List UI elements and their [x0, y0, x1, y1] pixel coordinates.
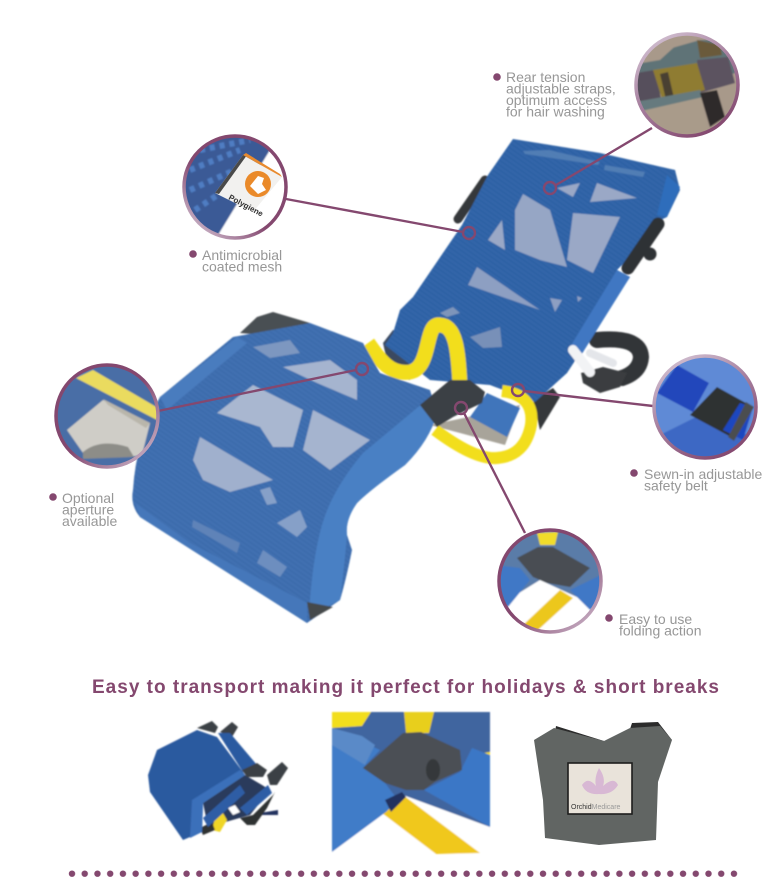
headrest side frame with knob: [628, 224, 658, 268]
callout line: antimicrobial mesh: [286, 199, 475, 239]
detail circle: toilet aperture: [54, 363, 160, 469]
dotted divider: [66, 867, 741, 881]
detail circle: safety belt buckle: [650, 350, 760, 460]
label: optional aperture: available: [62, 513, 117, 529]
label: rear tension straps: for hair washing: [506, 104, 605, 120]
label: folding action: folding action: [619, 622, 702, 638]
callout line: aperture: [158, 363, 368, 411]
chair frame and handle: [383, 180, 641, 430]
label: sewn-in safety belt: Sewn-in adjustable: [644, 466, 763, 482]
heading: Easy to transport making it perfect for holidays & short breaks: [92, 677, 719, 698]
detail circle: rear strap buckle: [634, 32, 740, 138]
white frame peg: [573, 350, 590, 372]
callout line: folding action: [455, 402, 525, 533]
label: folding action: [605, 611, 702, 638]
label: rear tension straps: adjustable straps,: [506, 80, 616, 96]
label: rear tension straps: [493, 69, 616, 120]
back rest mesh: [385, 139, 680, 402]
callout line: rear straps: [544, 128, 652, 194]
label: antimicrobial coated mesh: coated mesh: [202, 258, 282, 274]
folding joint and tube: [420, 380, 520, 437]
detail circle: folding joint: [495, 525, 605, 635]
photo: carry bag: [534, 722, 672, 845]
label: rear tension straps: Rear tension: [506, 69, 585, 85]
yellow safety strap loop: [368, 325, 531, 458]
label: rear tension straps: optimum access: [506, 92, 607, 108]
callout line: safety belt: [512, 384, 653, 406]
label: antimicrobial coated mesh: [189, 247, 282, 274]
seat mesh: [132, 323, 437, 623]
bag label: OrchidMedicare: [571, 804, 621, 811]
label: optional aperture: aperture: [62, 502, 114, 518]
label: sewn-in safety belt: safety belt: [644, 478, 708, 494]
label: optional aperture: Optional: [62, 490, 114, 506]
label: folding action: Easy to use: [619, 611, 692, 627]
label: antimicrobial coated mesh: Antimicrobial: [202, 247, 282, 263]
detail circle: Polygiene mesh label: [180, 130, 290, 240]
photo: folded chair: [148, 721, 288, 840]
polygiene tag: Polygiene: [227, 193, 265, 219]
foot rest dark frame: [240, 312, 310, 335]
label: sewn-in safety belt: [630, 466, 763, 494]
label: optional aperture: [49, 490, 117, 529]
photo: folding joint close-up: [332, 712, 490, 854]
bath chair product photo: [132, 139, 680, 623]
